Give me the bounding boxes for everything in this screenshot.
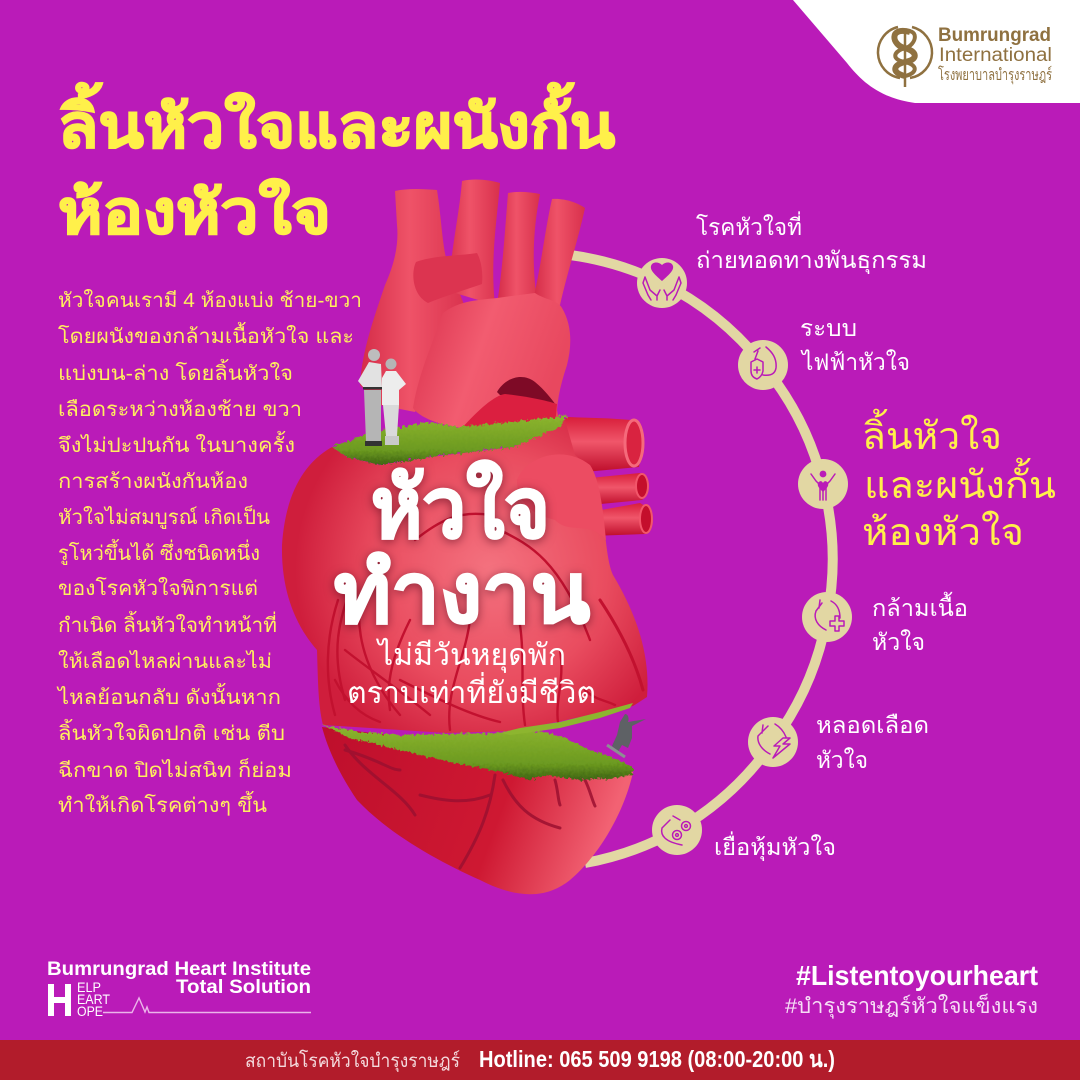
body text: จึงไม่ปะปนกัน ในบางครั้ง [58, 431, 295, 457]
help heart hope: EART [77, 991, 110, 1007]
hotline: Hotline: 065 509 9198 (08:00-20:00 น.) [479, 1046, 835, 1072]
label: heredity: ถ่ายทอดทางพันธุกรรม [696, 247, 927, 274]
logo: Bumrungrad International [878, 25, 1052, 87]
figures: elderly couple [358, 349, 406, 446]
heart headline: หัวใจ [371, 460, 550, 555]
label: valves and septum highlighted: ลิ้นหัวใจ [862, 408, 1002, 458]
heart headline [334, 460, 590, 640]
pulmonary artery tube [555, 417, 640, 472]
timeline arc [570, 255, 833, 863]
pulmonary vein upper opening [636, 474, 648, 498]
grass slab lower [323, 725, 633, 780]
body text: ฉีกขาด ปิดไม่สนิท ก็ย่อม [58, 757, 292, 782]
icon: person with heart [811, 471, 835, 500]
vessel: aortic branch 2 [497, 192, 540, 305]
vessel: superior vena cava and left trunk [360, 189, 470, 412]
figure: skater [607, 714, 646, 757]
label: coronary artery [816, 712, 929, 773]
body text: รูโหว่ขึ้นได้ ซึ่งชนิดหนึ่ง [58, 539, 260, 566]
icon: heart with plus [815, 600, 844, 631]
footer institute name: สถาบันโรคหัวใจบำรุงราษฎร์ [245, 1049, 460, 1073]
node: electrical system [738, 340, 788, 390]
icon: heart with bolt [758, 724, 790, 758]
icon: heart with gears [662, 816, 690, 845]
woman [382, 358, 406, 445]
body text: หัวใจไม่สมบูรณ์ เกิดเป็น [58, 504, 270, 530]
body text: โดยผนังของกล้ามเนื้อหัวใจ และ [58, 322, 354, 348]
logo: Bumrungrad International: International [939, 45, 1052, 66]
logo wordmark: Bumrungrad [938, 25, 1051, 46]
body text: ลิ้นหัวใจผิดปกติ เช่น ตีบ [58, 719, 285, 745]
pulmonary vein lower opening [640, 505, 652, 533]
heart headline: ทำงาน [334, 546, 590, 640]
heart subheading: ไม่มีวันหยุดพัก [376, 637, 566, 674]
man [358, 349, 382, 446]
grass slab upper [332, 415, 567, 465]
body text: ให้เลือดไหลผ่านและไม่ [58, 650, 272, 673]
body text: ของโรคหัวใจพิการแต่ [58, 577, 258, 600]
label: electrical system: ไฟฟ้าหัวใจ [800, 349, 910, 375]
big H [48, 984, 71, 1016]
hashtags: #Listentoyourheart [796, 960, 1038, 991]
logo corner panel [793, 0, 1080, 103]
title: ลิ้นหัวใจและผนังกั้น [58, 82, 615, 160]
label: electrical system [800, 315, 910, 375]
timeline labels [696, 211, 1056, 861]
label: valves and septum highlighted [862, 408, 1056, 554]
grass strip right [500, 703, 633, 735]
footer bar [0, 1040, 1080, 1080]
body text [56, 289, 362, 817]
institute name: Bumrungrad Heart Institute [47, 959, 311, 980]
label: heart muscle: กล้ามเนื้อ [872, 592, 968, 621]
institute logo [47, 959, 311, 1019]
label: valves and septum highlighted: และผนังกั้น [864, 457, 1056, 507]
help heart hope [77, 979, 110, 1019]
label: coronary artery: หลอดเลือด [816, 712, 929, 738]
label: valves and septum highlighted: ห้องหัวใจ [862, 511, 1024, 554]
icon: hands holding heart [643, 262, 681, 300]
institute tagline: Total Solution [176, 977, 311, 998]
body text: หัวใจคนเรามี 4 ห้องแบ่ง ช้าย-ขวา [58, 289, 362, 312]
label: heart muscle [872, 592, 968, 655]
label: pericardium: เยื่อหุ้มหัวใจ [714, 831, 836, 861]
title: ห้องหัวใจ [58, 178, 331, 246]
heart illustration [282, 180, 652, 894]
body text: แบ่งบน-ล่าง โดยลิ้นหัวใจ [58, 359, 293, 385]
icon: heart shield [751, 347, 776, 379]
hashtags [785, 960, 1038, 1019]
label: coronary artery: หัวใจ [816, 747, 868, 773]
label: heredity [696, 211, 927, 274]
heart lower body [322, 727, 633, 894]
logo emblem [878, 27, 932, 87]
heart subheading: ตราบเท่าที่ยังมีชีวิต [347, 672, 596, 710]
vessel: aortic branch 3 [534, 199, 585, 305]
aorta arch [413, 293, 570, 428]
node: heart muscle [802, 592, 852, 642]
label: heredity: โรคหัวใจที่ [696, 211, 802, 240]
label: heart muscle: หัวใจ [872, 629, 925, 655]
hashtags: #บำรุงราษฎร์หัวใจแข็งแรง [785, 992, 1038, 1019]
horizontal vessel [413, 253, 482, 303]
heart subheading [347, 637, 596, 710]
body text: การสร้างผนังกันห้อง [58, 471, 248, 493]
help heart hope: OPE [77, 1003, 103, 1019]
heartbeat line [103, 998, 311, 1012]
pulmonary artery opening [625, 420, 643, 466]
valve [462, 394, 557, 428]
help heart hope: ELP [77, 979, 101, 995]
node: pericardium [652, 805, 702, 855]
body text: ทำให้เกิดโรคต่างๆ ขึ้น [58, 791, 267, 817]
pulmonary vein lower [590, 503, 652, 536]
body text: กำเนิด ลิ้นหัวใจทำหน้าที่ [58, 611, 277, 637]
atrium lobe [517, 454, 606, 540]
heart upper body [282, 420, 648, 733]
title [58, 82, 615, 246]
node: heredity [637, 258, 687, 308]
vessel: aortic branch 1 [445, 180, 500, 305]
coronary veins lower [345, 745, 595, 868]
body text: เลือดระหว่างห้องช้าย ขวา [58, 399, 302, 421]
timeline nodes [637, 258, 852, 855]
node: coronary artery [748, 717, 798, 767]
pulmonary vein upper [590, 473, 647, 505]
coronary veins upper [328, 514, 643, 730]
label: electrical system: ระบบ [800, 315, 857, 341]
body text: ไหลย้อนกลับ ดังนั้นหาก [56, 683, 281, 709]
aorta arch opening [497, 377, 556, 405]
node: valves and septum [798, 459, 848, 509]
